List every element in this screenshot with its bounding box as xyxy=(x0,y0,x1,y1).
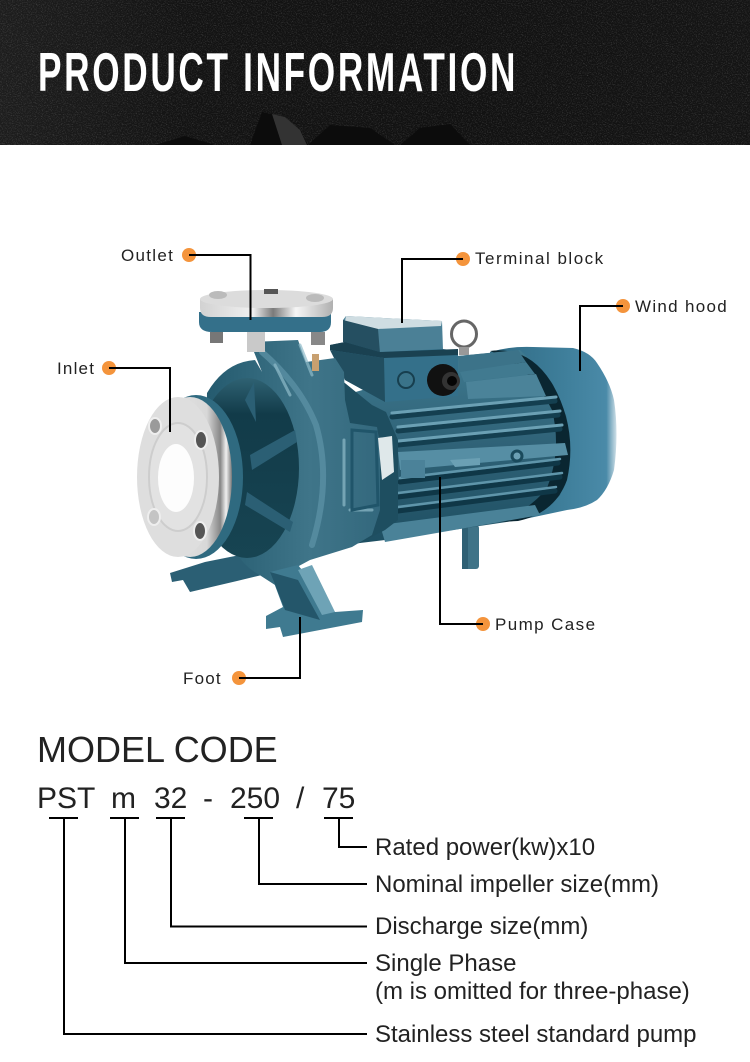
callout: wind hood: Wind hood xyxy=(635,297,728,316)
heading: model code: MODEL CODE xyxy=(37,729,278,770)
terminal block xyxy=(330,316,460,402)
volute recess xyxy=(195,378,299,558)
pump illustration xyxy=(137,289,616,637)
model code string xyxy=(37,782,355,815)
brass fitting xyxy=(312,354,319,371)
bearing housing xyxy=(300,375,398,550)
model code string: PST xyxy=(37,782,95,815)
callout: pump case xyxy=(440,477,596,634)
motor drain pipe xyxy=(462,525,479,569)
model code descriptions: Discharge size(mm) xyxy=(375,913,588,940)
model code descriptions: Rated power(kw)x10 xyxy=(375,834,595,861)
callout: outlet xyxy=(121,246,250,320)
inlet flange xyxy=(137,395,243,559)
eye bolt xyxy=(452,321,476,355)
header banner xyxy=(0,0,750,145)
model code connector lines xyxy=(49,818,367,1034)
flange bolts xyxy=(148,418,207,540)
callout: pump case: Pump Case xyxy=(495,615,596,634)
model code descriptions xyxy=(375,834,697,1048)
model code string: 32 xyxy=(154,782,187,815)
model code string: - xyxy=(203,782,213,815)
cable gland xyxy=(427,364,459,396)
volute casing xyxy=(205,340,380,585)
model code string: 250 xyxy=(230,782,280,815)
callout: inlet: Inlet xyxy=(57,359,95,378)
bottom foot xyxy=(266,565,363,637)
left foot xyxy=(170,555,262,592)
wind hood xyxy=(490,347,616,522)
upper motor ribs xyxy=(466,374,546,399)
callout: terminal block xyxy=(402,249,605,323)
model code descriptions: Nominal impeller size(mm) xyxy=(375,871,659,898)
outlet flange xyxy=(199,289,333,352)
rocks xyxy=(155,112,470,145)
callout: terminal block: Terminal block xyxy=(475,249,605,268)
callout: foot: Foot xyxy=(183,669,222,688)
model code descriptions: Single Phase xyxy=(375,950,516,977)
callout: wind hood xyxy=(580,297,728,371)
model code descriptions: Stainless steel standard pump xyxy=(375,1021,697,1048)
model code string: 75 xyxy=(322,782,355,815)
motor body xyxy=(345,350,570,543)
callout: inlet xyxy=(57,359,170,432)
model code string: / xyxy=(296,782,305,815)
callout: outlet: Outlet xyxy=(121,246,174,265)
model code string: m xyxy=(111,782,136,815)
title: PRODUCT INFORMATION xyxy=(38,41,515,103)
model code descriptions: (m is omitted for three-phase) xyxy=(375,978,690,1005)
callout: foot xyxy=(183,617,300,688)
cooling fins xyxy=(392,397,568,511)
outlet bolts xyxy=(209,289,325,352)
highlights on volute xyxy=(262,345,378,545)
